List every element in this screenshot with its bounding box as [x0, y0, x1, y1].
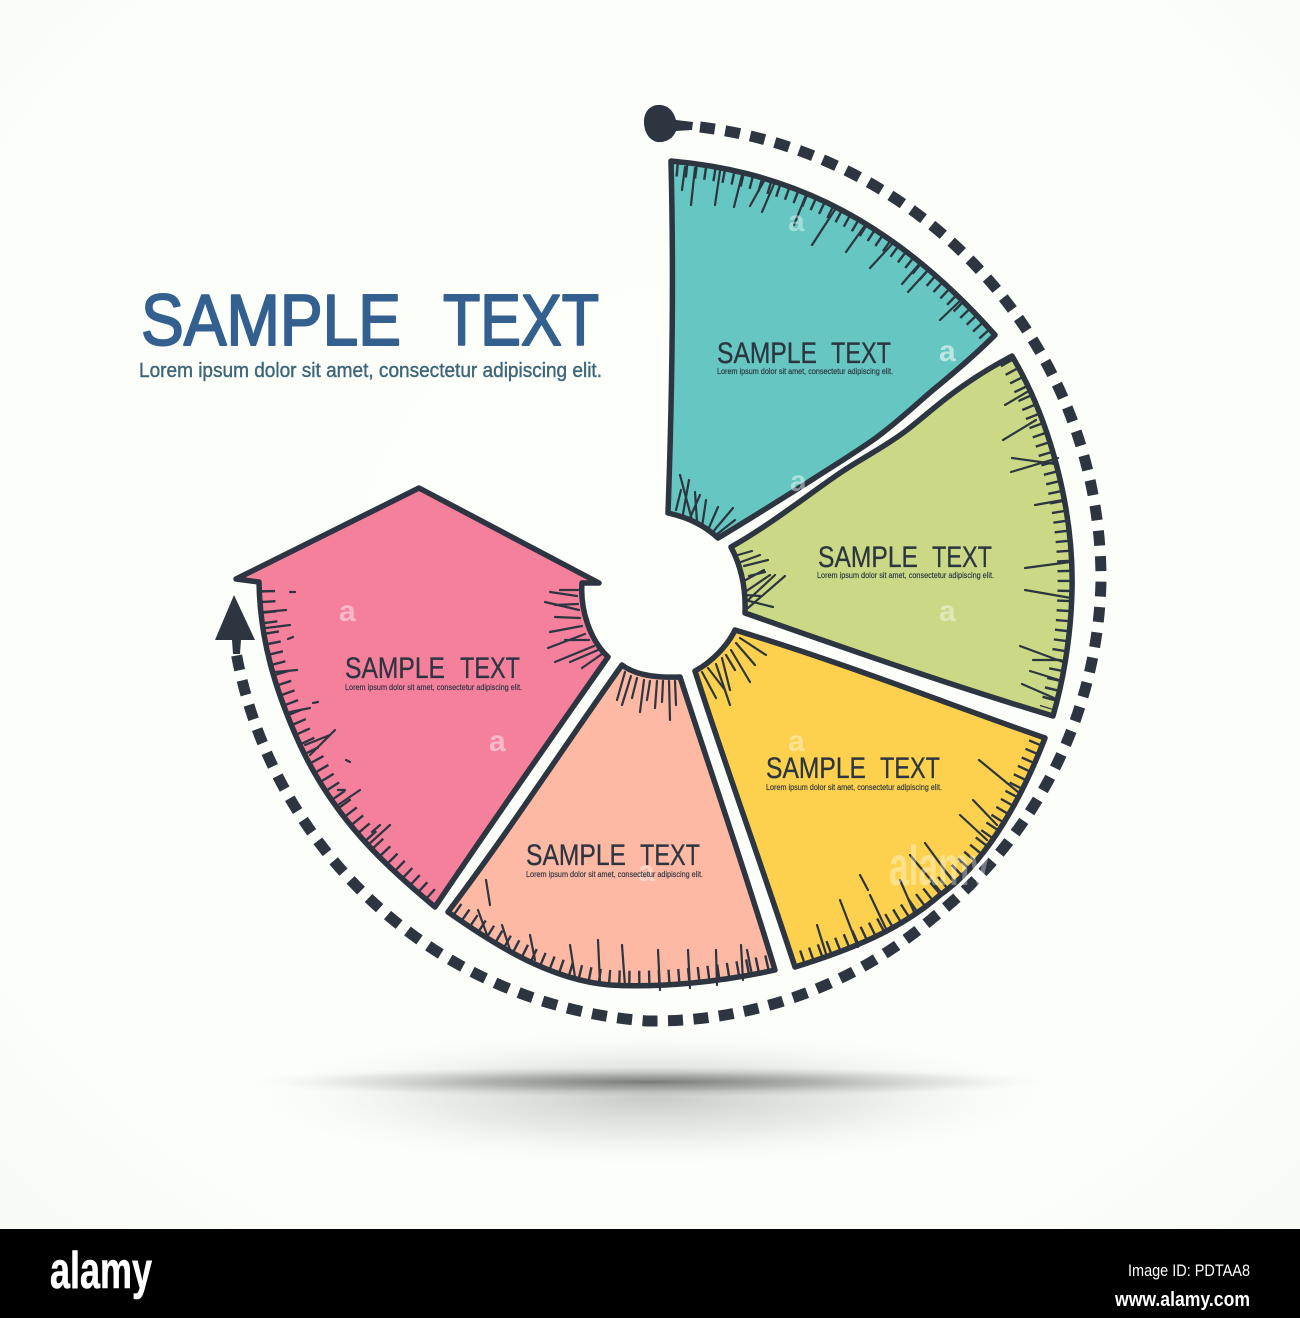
- teal label heading: [717, 337, 891, 370]
- watermark glyphs: a: [939, 595, 956, 628]
- peach label body: Lorem ipsum dolor sit amet, consectetur adipiscing elit.: [526, 869, 703, 879]
- watermark glyphs: a: [489, 725, 506, 758]
- yellow wedge: [695, 630, 1045, 967]
- peach label heading: TEXT: [640, 839, 700, 872]
- watermark glyphs: a: [790, 465, 807, 498]
- segment 2: green: [731, 356, 1072, 716]
- peach wedge: [448, 665, 775, 986]
- website: www.alamy.com: [1114, 1289, 1250, 1311]
- watermark glyphs: [339, 595, 506, 758]
- pink label: [345, 652, 522, 692]
- dashed progress path with start dot and arrow: [215, 105, 1101, 1021]
- green label heading: [818, 541, 992, 574]
- heading: [141, 281, 599, 361]
- yellow label heading: SAMPLE: [766, 752, 866, 785]
- watermark glyphs: [788, 205, 956, 498]
- image id: Image ID: PDTAA8: [1128, 1261, 1250, 1280]
- yellow hatching: [800, 742, 1036, 958]
- title block: [139, 281, 602, 382]
- dashed arc: [236, 127, 1101, 1021]
- segment 5: pink arrow: [236, 488, 608, 907]
- footer bar: [0, 1229, 1300, 1318]
- green wedge: [731, 356, 1072, 716]
- yellow label: [766, 752, 942, 792]
- pink label heading: TEXT: [460, 652, 520, 685]
- green label heading: SAMPLE: [818, 541, 918, 574]
- yellow label body: Lorem ipsum dolor sit amet, consectetur adipiscing elit.: [766, 782, 942, 792]
- green label: [817, 541, 994, 580]
- pink label heading: [345, 652, 520, 685]
- watermark glyphs: a: [788, 205, 805, 238]
- watermark glyphs: a: [939, 335, 956, 368]
- segment 1: teal: [668, 161, 995, 538]
- pink label heading: SAMPLE: [345, 652, 445, 685]
- icon: start dot: [644, 105, 693, 142]
- peach label heading: SAMPLE: [526, 839, 626, 872]
- peach label: [526, 839, 703, 879]
- heading: SAMPLE: [141, 281, 401, 361]
- black band: [0, 1229, 1300, 1318]
- teal label body: Lorem ipsum dolor sit amet, consectetur adipiscing elit.: [717, 366, 893, 376]
- heading: TEXT: [443, 281, 599, 361]
- watermark glyphs: alamy: [889, 834, 989, 897]
- green label body: Lorem ipsum dolor sit amet, consectetur adipiscing elit.: [817, 570, 994, 580]
- pink hatching: [268, 590, 432, 896]
- yellow label heading: TEXT: [880, 752, 940, 785]
- teal label: [717, 337, 893, 376]
- watermark glyphs: a: [788, 725, 805, 758]
- segment 3: yellow: [695, 630, 1045, 967]
- green label heading: TEXT: [932, 541, 992, 574]
- teal label heading: SAMPLE: [717, 337, 817, 370]
- subheading: Lorem ipsum dolor sit amet, consectetur adipiscing elit.: [139, 360, 602, 382]
- logo: alamy: alamy: [50, 1242, 152, 1300]
- icon: arrowhead: [215, 595, 255, 654]
- watermark glyphs: a: [638, 855, 655, 888]
- teal label heading: TEXT: [831, 337, 891, 370]
- segment 4: peach: [448, 665, 775, 990]
- teal wedge: [668, 161, 995, 538]
- peach hatching: [455, 908, 768, 978]
- yellow label heading: [766, 752, 940, 785]
- ground shadow: [230, 1026, 1070, 1170]
- pink arrow wedge: [236, 488, 608, 907]
- green hatching: [1006, 362, 1064, 708]
- watermark glyphs: a: [339, 595, 356, 628]
- watermark glyphs: [788, 725, 989, 897]
- peach label heading: [526, 839, 700, 872]
- teal hatching: [676, 170, 985, 335]
- pink label body: Lorem ipsum dolor sit amet, consectetur adipiscing elit.: [345, 682, 522, 692]
